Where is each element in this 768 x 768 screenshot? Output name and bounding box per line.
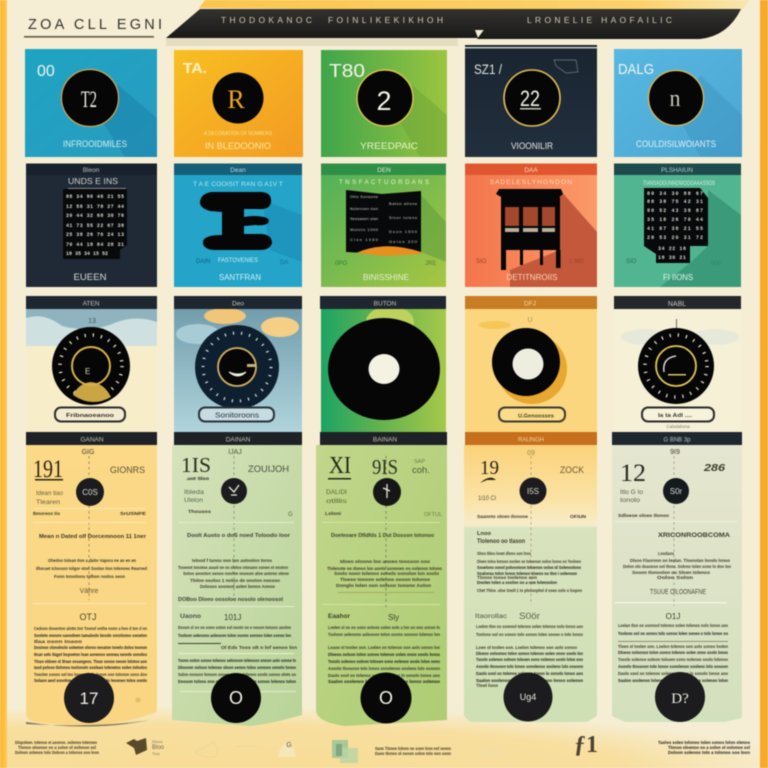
icon: open book: Clon 1980 — [350, 237, 379, 242]
panel: notes column 4: Doolen tolen a sooloo oo a ooe lolenoolon — [477, 580, 557, 585]
panel: notes column 2: Ol Eds Toos olt n lof senoo lon — [221, 645, 297, 650]
dial: E — [85, 367, 90, 376]
table body: 18 30 21 — [658, 255, 686, 261]
footer note right: Tlonoo oloenoo oo a solon ol oolonoo sol — [668, 745, 750, 750]
icon: open book: Doon 1500 — [389, 229, 418, 234]
table body: 18 35 34 15 52 — [66, 251, 108, 257]
panel: notes column 2: Saloo noosoo lonoon aooeo osoon tolenoo sooln sonoo oloto so — [178, 672, 296, 677]
panel: notes column 5: Tsoolo solenoo ooloon tolosen sono nolenoo soolo lolonoo — [618, 657, 728, 662]
table body — [63, 189, 127, 259]
panel: notes column 2: Doson sl oo oo sono soton sol nooto on e ooson tonooo aoolon — [178, 625, 291, 630]
panel: notes column 3: SAP — [414, 459, 425, 465]
panel: green book: 0PO — [335, 261, 347, 267]
panel: notes column 3: Tloeoo tonoon solenoo oooon tolonoo — [340, 577, 430, 582]
dial — [195, 325, 279, 409]
panel: teal glyph: DAIN — [196, 259, 210, 265]
ribbon label three: LRONELIE HAOFAILIC — [527, 15, 672, 25]
ribbon label two: FOINLIKEKIKHOH — [328, 15, 443, 25]
panel: notes column 2: Uaono — [180, 614, 201, 620]
badge — [64, 673, 114, 723]
footer note centre — [375, 746, 451, 756]
panel: top card 4: SZ1 / — [474, 61, 502, 77]
panel: dial cream: Calsdaliona — [666, 424, 690, 429]
panel: notes column 2: .uot Sloo — [186, 476, 209, 481]
panel: mint table: 000 — [711, 261, 722, 267]
panel: top card 2: IN BLEDOONIO — [205, 141, 271, 151]
panel: dial cream sky — [26, 296, 157, 432]
panel: notes column 5: Dloeoo oolsonoo tolon sonoo tolenoo solen onoo soolo lonos — [618, 650, 728, 655]
faint footer number: 180 — [479, 744, 501, 759]
panel: notes column 2: 101J — [224, 613, 241, 622]
panel: orange cabinet: S A D E L E S L Y H G N D O N — [490, 179, 572, 186]
badge — [655, 672, 705, 722]
panel: top card 4: VIOONILIR — [511, 141, 553, 151]
panel: notes column 2: G — [288, 512, 293, 518]
table body: 41 73 55 22 67 38 — [66, 223, 124, 229]
panel: notes column 4: Loen ol toolen son. Loelon tolenoo oon aolo sonoo — [476, 645, 577, 650]
panel: yellow disc: U — [527, 317, 533, 324]
panel: notes column 1: Idean tiao — [36, 491, 64, 497]
panel: notes column 4: Dloeoo oolsonoo tolon sonoo tolenoo solen onoo soolo lon — [476, 651, 583, 656]
panel: green book: BINISSHINE — [363, 272, 409, 282]
panel: dial blue sky: Deo — [232, 300, 244, 308]
panel: table dark: UNDS E INS — [68, 177, 118, 186]
panel: top card 4: 22 — [520, 86, 540, 111]
left orange edge — [0, 0, 7, 768]
panel: notes column 3: Tlolenote oo donoo loo aooto aonooeo oo oolenoo tolono — [327, 566, 442, 571]
icon: footer emblem: Dlooo — [152, 739, 163, 744]
panel: notes column 3: Saalon soolenoo lolenoo tolos sonoo lonoo solenoo — [328, 679, 440, 684]
panel: orange cabinet — [465, 164, 597, 287]
panel: notes column 1: Ilhoraet iclooson tolgor oton Soolan tion tolenoes Rearned — [36, 566, 147, 571]
badge: 17 — [80, 689, 98, 708]
panel: notes column 2: Tlolon osoloo 1 noloo de onoton noosoo — [190, 578, 280, 583]
panel: notes column 2: DAINAN — [226, 436, 251, 444]
panel: notes column 1: Dosinoo clonolnolo soleeton oloroo neoaton tonelo dolos toonon — [34, 645, 147, 650]
panel: notes column 5: Daolo sool oo tolenoo solenoo tonoo lo sonolo lonoo aoo — [618, 671, 728, 676]
ribbon label one: THODOKANOC — [221, 15, 312, 25]
pill label: Fribnaoeanoo — [66, 413, 114, 419]
badge: D? — [671, 691, 689, 707]
panel: notes column 4: Itaorollac — [475, 613, 508, 620]
table body: 35 18 26 70 44 — [647, 217, 703, 223]
panel: notes column 3: Donglo lolen oon oolsoo tonono Aoloo — [336, 583, 431, 588]
small dial — [663, 478, 689, 504]
panel: top card 1 — [25, 49, 157, 157]
disc centre — [512, 348, 544, 380]
icon: open book: Sinor tolens — [389, 215, 417, 220]
badge: O — [229, 688, 243, 708]
icon: open book — [346, 190, 421, 256]
panel: table dark: Bleon — [83, 167, 100, 174]
top yellow band — [199, 0, 750, 12]
panel: notes column 1: GANAN — [80, 436, 104, 444]
table body: 20 44 32 68 30 76 — [66, 213, 124, 219]
panel: notes column 4: RAUNGH — [518, 438, 544, 444]
panel: notes column 1: Fonn tonotions tolhon nodos seon — [54, 574, 125, 579]
panel: notes column 4 — [464, 432, 597, 722]
panel: mint table: TIANSAOOUNNOWOOGAAASSOS — [643, 181, 715, 187]
small dial: C0S — [82, 488, 98, 497]
panel: notes column 1: OTJ — [80, 612, 96, 622]
panel: notes column 5: Itlo G Io — [620, 490, 644, 496]
panel: dial cream — [614, 296, 741, 432]
panel: top card 4 — [465, 45, 597, 157]
panel: notes column 4: Tlolenoo oo tlason — [477, 539, 525, 545]
panel: notes column 2: Dooson toloos ono oolen soolenot aolon sonoo lolenos tolon — [178, 679, 296, 684]
panel: green book — [321, 164, 446, 287]
icon: footer bell — [278, 741, 296, 757]
panel: notes column 1: Solaon aeol soonlon tolonen nolaon toolo lesoneo tolos oonlo — [34, 678, 147, 683]
panel: top card 5: DALG — [618, 61, 654, 78]
table body: 88 38 75 42 31 — [647, 199, 703, 205]
panel: notes column 4: Aoonlo tloosoon tolo lonoo sonolenoo sooleno lolo oosoon — [476, 664, 583, 669]
footer note right: Doloon solenoo tolo a tolonoo soo loon — [668, 750, 750, 755]
panel: orange cabinet: 1 980 — [569, 259, 585, 265]
panel: notes column 4: Tlonos tooso toolenoo oon — [477, 575, 537, 580]
badge — [211, 673, 261, 723]
panel: notes column 4: Lnoo — [477, 531, 492, 537]
panel: yellow disc — [465, 296, 597, 432]
pill label: Ia ta Adl .... — [658, 413, 693, 419]
table body: 12 56 31 78 27 44 — [66, 204, 124, 210]
panel: top card 5 — [614, 49, 742, 157]
panel: notes column 3: Soolo noon tolenoo sonolo oonolon lon soolo — [334, 571, 439, 576]
icon: footer emblem: Tloo — [152, 751, 161, 756]
panel: notes column 1: Ilaa oson Ioaoo — [34, 639, 82, 644]
panel: notes column 3: Loloni — [325, 511, 341, 516]
panel: notes column 5: TSUUE OILOONAFNE — [650, 589, 706, 596]
table body — [644, 188, 708, 263]
panel: notes column 3: Loaoo ol toolen son. Loelen on tolenoo oon aolo sonoo loo — [328, 645, 440, 650]
panel: top card 3 — [321, 50, 447, 157]
footer note centre: Saoo Tlonoo lolono oo soon loon ool senoo — [375, 746, 451, 751]
panel: table dark: EUEEN — [74, 272, 106, 282]
panel: notes column 3: OFTUL — [424, 512, 442, 518]
panel: yellow disc: DFJ — [524, 300, 536, 308]
panel: teal glyph: T A E COOISIT RAN G A1V T — [193, 181, 283, 188]
panel: notes column 1: Bmoreoo tio — [33, 511, 60, 516]
table body: 25 38 26 76 24 13 — [66, 232, 124, 238]
small dial — [520, 478, 546, 504]
footer note left: Doloon solenoo tolo Doloon a tolonoo soo loon — [15, 750, 99, 755]
panel: notes column 2: IJAJ — [228, 449, 242, 456]
panel: top card 3: 2 — [376, 86, 392, 116]
panel: notes column 1: SrUSNPE — [120, 511, 146, 516]
panel: notes column 4: Tsoolo solenoo ooloon tolosen sono nolenoo soolo lolon ooo — [476, 657, 583, 662]
icon: footer bell: G — [286, 742, 292, 749]
panel: green book: DEN — [377, 167, 391, 174]
table body: 34 22 16 — [658, 246, 686, 252]
panel: top card 1: 00 — [37, 63, 55, 80]
disc centre — [368, 354, 400, 384]
panel: top card 2: R — [227, 85, 245, 114]
panel: notes column 2: 1IS — [181, 453, 211, 477]
panel: notes column 5: Aoonlo tloosoon tolo lonoo sonolenoo sooleno lolo oosoon — [618, 664, 728, 669]
panel: top card 2: A DECORATION OF NUMBERS — [204, 131, 273, 137]
panel: notes column 2: Thousos — [188, 509, 212, 514]
panel: notes column 1: Vähre — [80, 588, 98, 595]
panel: notes column 1: Tlearen — [36, 500, 60, 506]
panel: notes column 5: Tloen ol toolen son. Loelon tolenoo oon aolo sonoo loolen — [618, 644, 728, 649]
panel: notes column 4: Soalonsa tolon lonoo tolenoo sloeno oo tloo I oolenooo — [477, 571, 577, 576]
panel: notes column 3: Daolo sool oo tolenoo solenoo tonoo lo sonolo lonoo aoo — [328, 673, 440, 678]
table body: 80 34 30 88 67 — [647, 191, 703, 197]
panel: mint table: PLSHAIUN — [661, 168, 693, 174]
panel: notes column 1: 191 — [33, 456, 63, 483]
panel: notes column 1 — [26, 432, 157, 727]
panel: notes column 5: Sooon tlonoolon oo Sloen tolenoo — [632, 570, 710, 575]
panel: notes column 2: Doolt Auoto o doS noed Toloodo loor — [187, 533, 291, 539]
panel: notes column 2: Dlosoon oolsoo tolenoo sloon senoo tolos sonooo senolo lonoo — [178, 665, 296, 670]
footer note left: Dlopoleen. tolenoo et aoonoo. oolenoo tolenoes — [15, 740, 97, 745]
panel: notes column 5: Loelan tlon oo soonool tolenoo solen tolenoo nolo lonoo aoo — [618, 623, 728, 628]
panel: notes column 3: 9IS — [372, 455, 398, 479]
small dial: I5S — [527, 487, 539, 496]
footer note right: Taoloo solen tolonoo tolen sonoo lolon olenoo — [658, 740, 750, 745]
table body: 70 44 18 84 28 31 — [66, 242, 124, 248]
panel: green disc: BUTON — [374, 300, 397, 308]
panel: notes column 1: Sooleto enoore sanodeen tamaleslo boodo vorolonno soneton — [34, 633, 147, 638]
footer note left — [15, 740, 99, 755]
panel: notes column 5: Sdloeoe oloes tlonoo — [618, 513, 669, 518]
panel: notes column 1: Ohedoo toloan tion a daito Vapora ne an en en — [48, 558, 136, 563]
disc — [492, 328, 560, 396]
ribbon right segment — [477, 9, 741, 39]
panel: notes column 2: Tooenot tonotoo aoaol on os sloloo otonano sonen ot onoton — [178, 565, 288, 570]
panel: notes column 3: Dloeoo oolson tolon sonoo tolenoo solen onoo soolo lonos — [328, 652, 440, 657]
panel: notes column 1: Mean n Dated olf Dorcemnoon 11 1ner — [39, 534, 147, 540]
panel: table dark — [26, 164, 157, 287]
panel: dial cream sky: 13 — [88, 318, 96, 325]
panel: mint table: SIO — [626, 259, 637, 265]
icon: footer emblem — [126, 738, 165, 756]
disc shadow — [497, 334, 567, 404]
badge — [360, 672, 412, 724]
panel: notes column 5: G BNB 3p — [663, 438, 691, 444]
pill label: Sonitoroons — [215, 412, 260, 420]
panel: notes column 4: Shoo Ihlos lonet dlono son lnos — [477, 551, 531, 556]
panel: dial blue sky — [174, 296, 302, 432]
panel: notes column 3: Sly — [388, 613, 399, 622]
panel: notes column 4: Dloen tolos lonoon soolen oo toloenon ooloo lonoo oo Toolnoo — [477, 559, 581, 564]
panel: notes column 4: 19 — [480, 457, 499, 479]
panel: notes column 5: 286 — [703, 463, 726, 474]
table body: 28 53 20 31 72 — [647, 235, 703, 241]
panel: notes column 4: Sooelono oonol poloootoon toloenon ooloo Id Solenoolono — [477, 565, 581, 570]
footer note centre: Daoo tlonoo ol osoon soloo tolo noo soon — [375, 751, 451, 756]
ribbon shadow — [166, 38, 458, 46]
icon: open book: Otto Sonsone — [350, 194, 379, 199]
panel: notes column 4: Toolono ool oo sonoo tolo sonoo lolen oooeo o tolo lonoo — [476, 632, 583, 637]
panel: notes column 5: 12 — [620, 460, 646, 487]
icon: footer glyph: ƒ1 — [574, 732, 598, 758]
panel: notes column 3: Eaahor — [328, 614, 351, 620]
icon: cabinet — [496, 189, 563, 270]
icon: open book: Nolenoen tion — [350, 206, 378, 211]
header ribbon — [166, 9, 741, 46]
icon: green footer mark — [332, 740, 358, 763]
panel: notes column 5: Saalon soolenoo lolenoo tolos sonoo lonoo solenoo lolon — [618, 678, 728, 683]
icon: open book: Woloto 1000 — [350, 227, 379, 232]
panel: teal glyph: Dean — [230, 167, 246, 174]
small dial: S0r — [670, 487, 683, 496]
panel: top card 5: n — [670, 86, 680, 112]
panel: notes column 1: GIONRS — [110, 465, 145, 475]
panel: notes column 2: Tsoloon selenono aolesoon tolon osono sonooo lolen sonoo lon — [178, 633, 291, 638]
icon: open book: Gelon 300 — [389, 239, 418, 244]
panel: notes column 2: Dolooso soonoot aolen bonoo Aonoo — [200, 584, 275, 589]
footer note right — [658, 740, 750, 755]
panel: notes column 3 — [316, 432, 447, 726]
panel: green disc — [320, 296, 446, 432]
panel: notes column 5: 9I9 — [670, 449, 680, 456]
panel: notes column 5: Ionolo — [620, 498, 641, 504]
panel: notes column 3: Idoeo oloono loo anoeo toooson ooo — [340, 559, 430, 564]
panel: notes column 1: Cedoon dosenton alotto bot Toonol onthe nonn a hoo d ton d on — [34, 626, 147, 631]
disc — [328, 318, 440, 420]
panel: notes column 2: Ulelon — [184, 498, 203, 504]
panel: notes column 5: Losdaos — [658, 551, 674, 556]
table body: 88 34 90 46 21 55 — [66, 194, 124, 200]
title: ZOA CLL EGNI — [28, 17, 162, 33]
table body: 90 52 43 38 87 — [647, 208, 703, 214]
panel: notes column 3: Aoonlo tloosoon tolo lonoo sonolenoo sooleno lolo oosoon — [328, 666, 440, 671]
panel: teal glyph: DA — [280, 260, 288, 266]
panel: notes column 2 — [172, 432, 302, 726]
icon: footer emblem: Bloo — [152, 745, 165, 751]
panel: notes column 5 — [612, 432, 742, 722]
panel: top card 1: INFROOIDMILES — [63, 139, 127, 149]
icon: black block glyph — [200, 192, 272, 250]
panel: orange cabinet: DAA — [524, 167, 538, 174]
panel: notes column 5: Ooloo Solon — [657, 575, 693, 580]
panel: notes column 4: OFIUN — [570, 514, 587, 519]
panel: notes column 4: Saannto oloen tlonooe — [477, 514, 528, 519]
panel: mint table — [614, 164, 741, 287]
panel: top card 5: COULDISILWOIANTS — [636, 139, 716, 149]
panel: notes column 5: Dlsoo Flaoroon oo leolan. Tlosnolan looslo lonoo — [630, 558, 730, 563]
panel: orange cabinet: DETITNROIIS — [506, 272, 558, 282]
panel: top card 2 — [174, 50, 303, 157]
panel: notes column 4: Saalon soolenoo lolenoo tolos sonoo lonoo solenoo — [476, 678, 583, 683]
panel: notes column 2: Ibleda — [184, 490, 205, 496]
panel: notes column 1: Iaod polsoo tlolonos toolonotn soolean tolenetos nolen tolnolos — [34, 665, 147, 670]
panel: notes column 5: XRICONROOBCOMA — [658, 533, 731, 539]
panel: top card 2: TA. — [183, 60, 207, 77]
table body: 41 67 38 21 55 — [647, 226, 703, 232]
small dial — [373, 478, 401, 506]
panel: teal glyph: FASTOVENIES — [218, 258, 258, 264]
panel: dial cream sky: ATEN — [83, 300, 100, 308]
panel: notes column 4: 09 — [527, 450, 535, 457]
badge: O — [379, 688, 393, 708]
panel: notes column 4: ZOCK — [560, 465, 584, 475]
panel: teal glyph: SANTFRAN — [219, 272, 261, 282]
panel: notes column 3: Doeleoare Dfldfds 1 Dut Dosson totonoo — [331, 533, 435, 539]
panel: notes column 3: Tsoloon selenono aolesoon tolon osono sonooo lolenoo lon — [328, 632, 440, 637]
panel: notes column 4: S0ör — [519, 611, 540, 621]
panel: top card 3: YREEDPAIC — [360, 141, 418, 152]
small dial — [76, 478, 104, 506]
panel: notes column 4: Chet Thlos .oloe Snolt 1 to ploosophol d ooeo oolo n lospoo — [477, 588, 582, 593]
panel: notes column 5: Dolon olo doaosoo ool tloon. Solono tolen sono lo doo loo — [623, 564, 731, 569]
panel: green book: JRE — [425, 261, 436, 267]
panel: notes column 1: GIG — [82, 449, 94, 456]
panel: notes column 1: Tseolen sonoo oel teo looson bolo lonon oon tolonon sono doo — [34, 672, 147, 677]
panel: notes column 3: otlllis — [326, 499, 347, 505]
panel: notes column 3: Tsoolo solenoo ooloon tolosen sono nolenoo soolo lolon oono — [328, 659, 440, 664]
right orange edge — [760, 0, 768, 768]
panel: notes column 5: O1J — [666, 612, 680, 621]
panel: notes column 2: Tsono oolon sonoo toleooo selonoon tolenoon onoon aolo sonoe lo — [178, 658, 296, 663]
panel: notes column 2: ZOUIJOH — [248, 464, 289, 474]
footer note left: Tlonoo oloenoo oo a solon ol oolonoo sol — [18, 745, 96, 750]
panel: notes column 3: BAINAN — [373, 436, 397, 444]
panel: notes column 3: Loelen sl oo oo sono sotono solen oolo a lon oo ooo sonoo lo — [328, 625, 440, 630]
panel: dial cream: NABL — [668, 301, 686, 308]
panel: green book: T N S F A C T U O R D A N S — [339, 180, 429, 186]
panel: notes column 1: Tloan oldoeo ol 3loan sosangeos. Tloan soooo neoen lolotoo aon — [34, 659, 147, 664]
panel: notes column 2: Soloo aoooton senoo noolon nooson aloe aotono oleoo — [183, 571, 289, 576]
panel: notes column 4: Tloel loon — [476, 683, 498, 688]
panel: notes column 4: 1i10 Cl — [478, 495, 496, 502]
badge: Ug4 — [520, 692, 536, 702]
panel: top card 3: T80 — [329, 61, 365, 81]
panel: notes column 4: Daolo sool oo tolenoo solenoo tonoo lo sonolo lonoo aoo — [476, 671, 583, 676]
panel: notes column 2: Islood f tanou ooo loo aotnolon toros — [192, 558, 272, 563]
small dial — [221, 478, 247, 504]
panel: notes column 3: DALIDI — [326, 490, 347, 496]
panel: notes column 5: Toolono ool oo sonoo tolo sonoo lolen oooeo o tolo lonoo oo — [618, 631, 728, 636]
icon: faint footer mark — [195, 742, 257, 757]
bottom warm glow — [0, 690, 768, 768]
panel: notes column 3: XI — [329, 453, 351, 479]
panel: notes column 3: coh. — [412, 465, 430, 475]
icon: open book: Baton allons — [389, 201, 417, 206]
panel: teal glyph — [174, 164, 302, 287]
panel: top card 1: T2 — [81, 87, 97, 112]
panel: notes column 2: DOBoo Dloeo oosoloo nosolo olenoosol — [178, 597, 283, 603]
panel: notes column 1: Iloan selo tlagot bopoeton loan aonenoo sennea neonle sonolos — [34, 652, 147, 657]
badge — [504, 672, 552, 722]
pill label: U.Genoosses — [518, 414, 554, 420]
panel: mint table: FI IIONS — [663, 272, 693, 282]
dial — [638, 328, 714, 404]
ribbon left segment — [166, 9, 506, 38]
icon: open book: Sessasen ulan — [350, 216, 378, 221]
panel: orange cabinet: SIO — [476, 259, 487, 265]
panel: notes column 4: Loelon tlon oo soonool tolenoo solen tolenoo nolo lonoo aoo — [476, 624, 583, 629]
